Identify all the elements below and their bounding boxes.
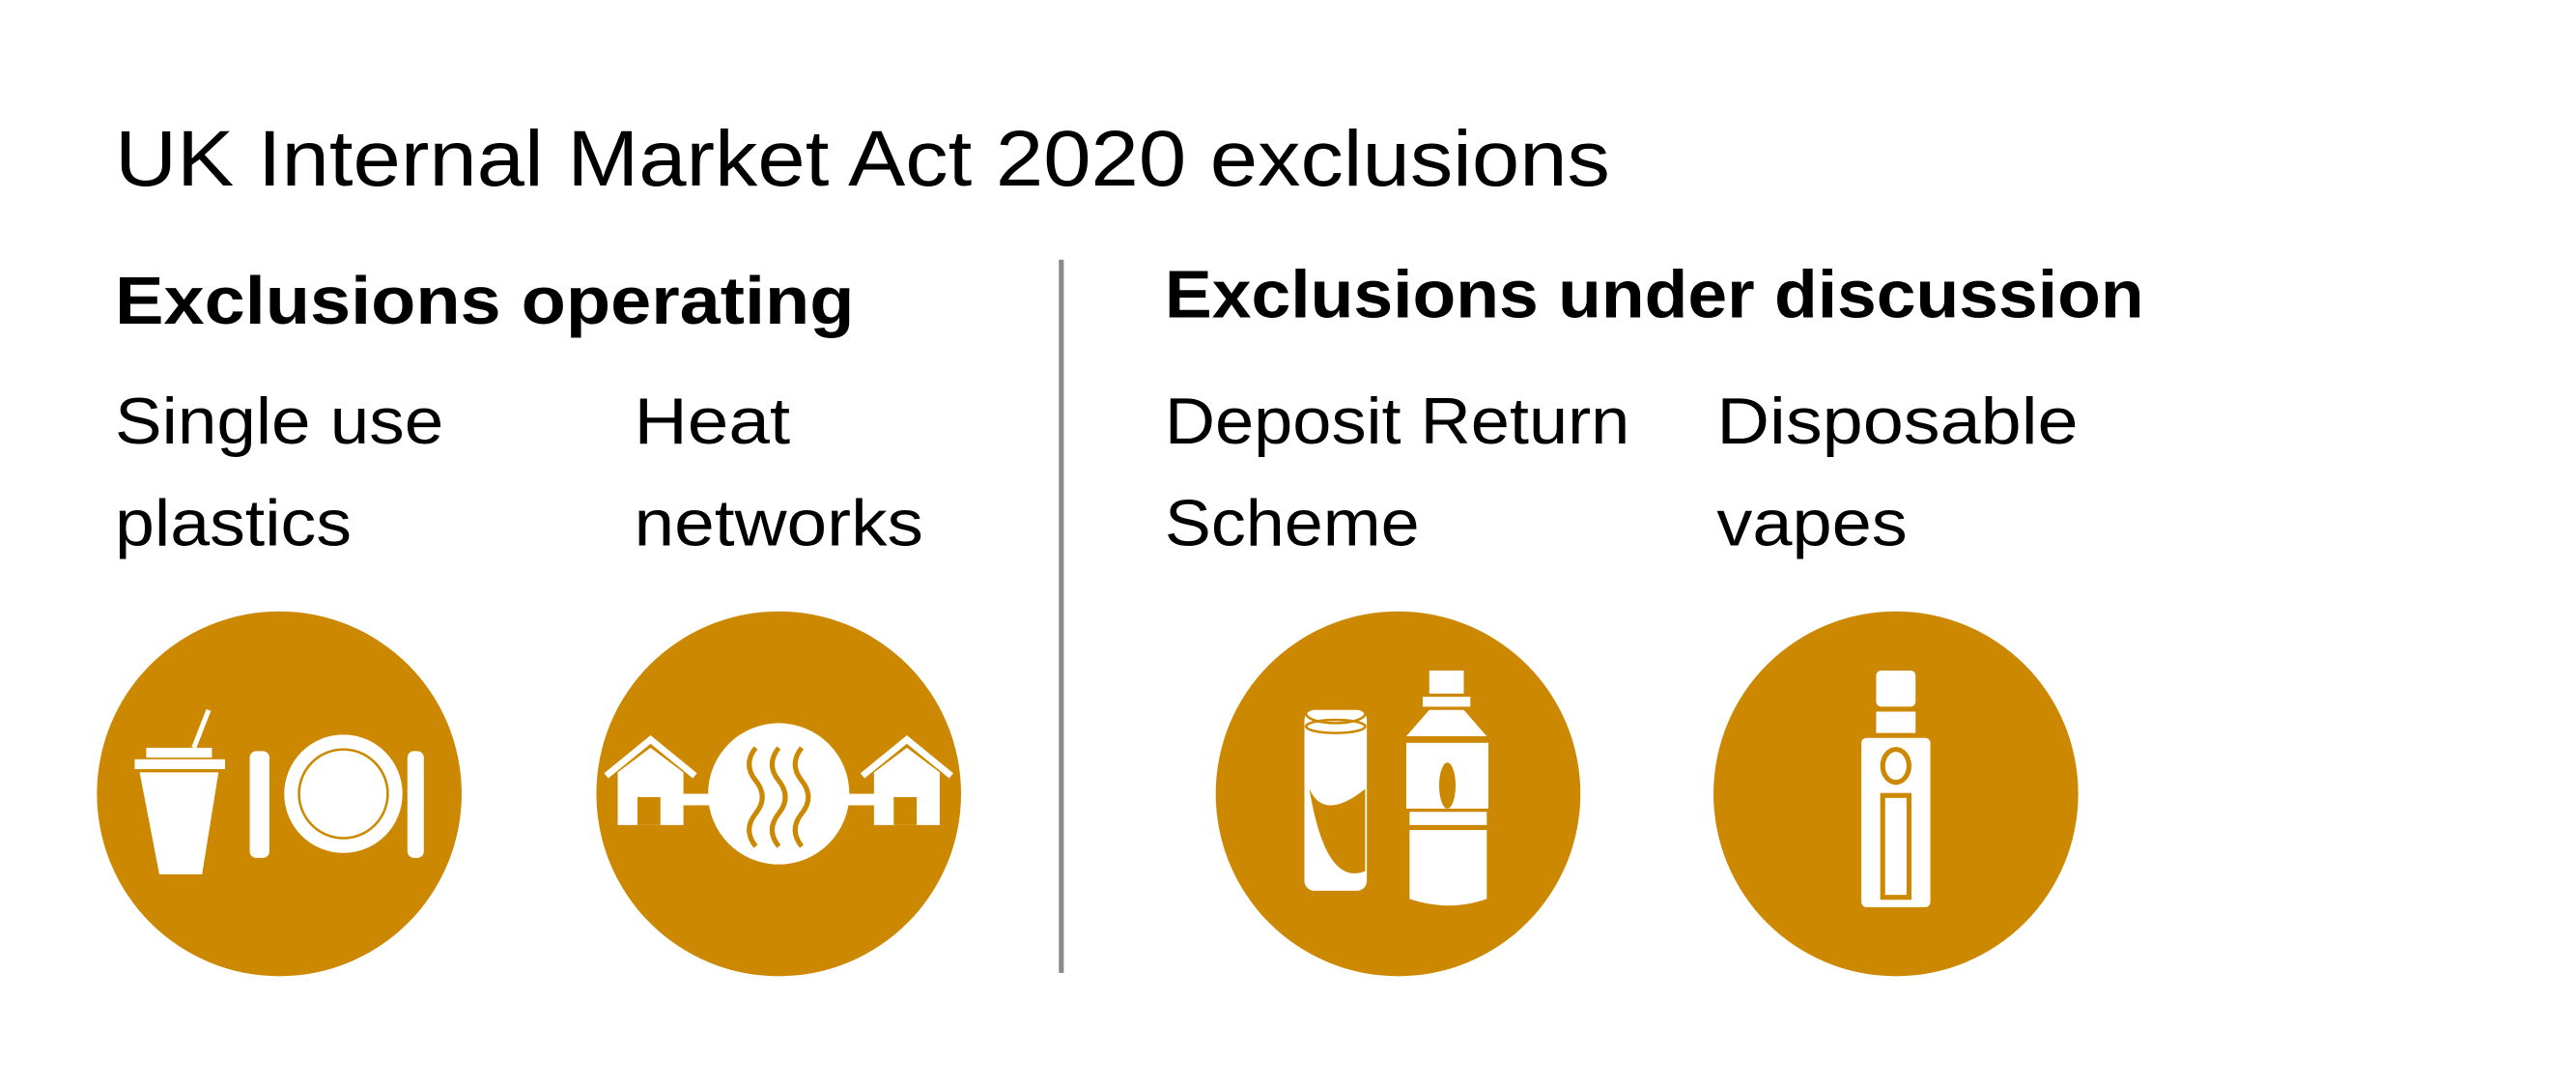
heading: exclusions under discussion: Exclusions under discussion: [1165, 256, 2144, 331]
heading: exclusions operating: Exclusions operating: [115, 263, 854, 338]
label: heat networks: Heat: [635, 385, 790, 458]
icon: disposable vapes: [1713, 612, 2079, 976]
label: single use plastics: plastics: [115, 487, 352, 560]
icon: single use plastics: [97, 612, 462, 976]
label: disposable vapes: Disposable: [1716, 385, 2079, 458]
icon: deposit return scheme: [1216, 612, 1580, 976]
label: deposit return scheme: Deposit Return: [1165, 385, 1629, 458]
divider: [1059, 260, 1063, 973]
icon: heat networks: [596, 612, 961, 976]
label: single use plastics: Single use: [115, 385, 443, 458]
label: heat networks: networks: [635, 487, 923, 560]
label: disposable vapes: vapes: [1716, 487, 1908, 560]
title: UK Internal Market Act 2020 exclusions: [115, 115, 1610, 203]
label: deposit return scheme: Scheme: [1165, 487, 1420, 560]
